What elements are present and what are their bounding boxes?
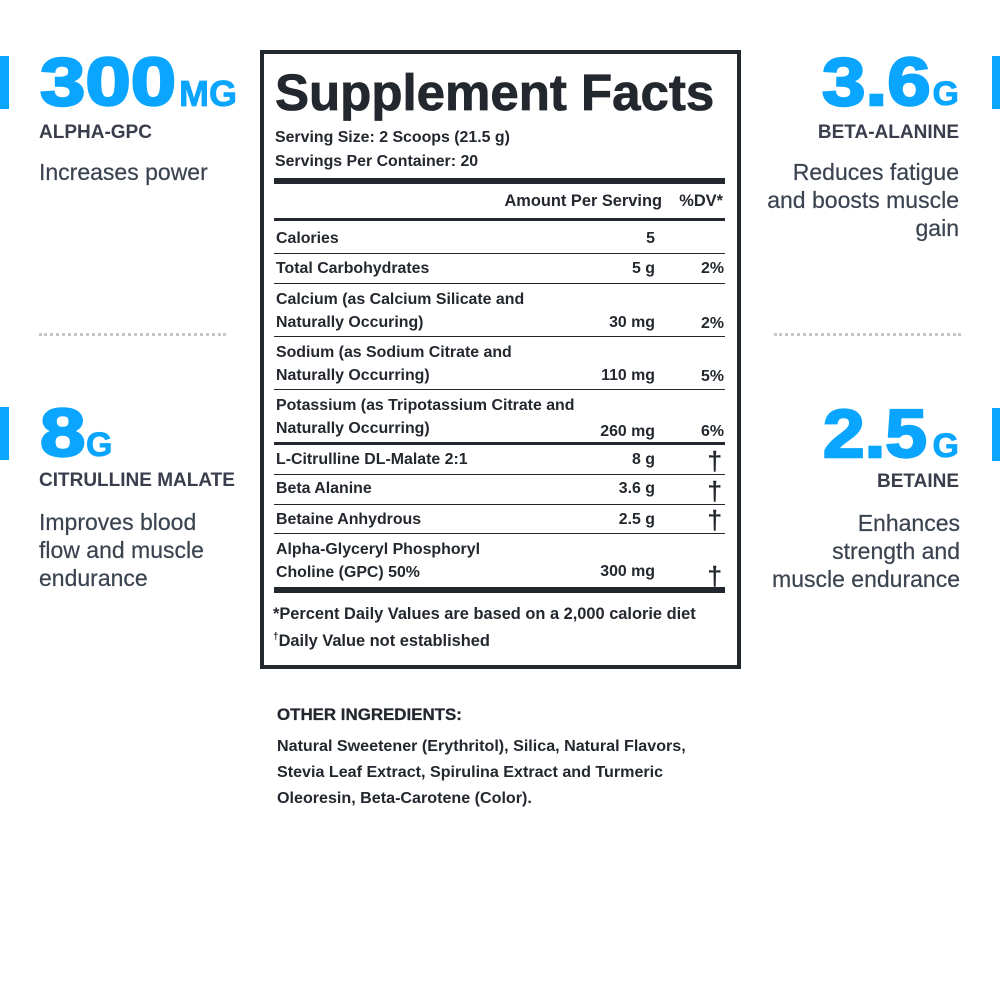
row: beta alanine: [276, 476, 722, 506]
row: sodium: Sodium (as Sodium Citrate and: [276, 344, 512, 361]
value: 300: [40, 44, 176, 120]
row: betaine: †: [708, 505, 722, 535]
row: calcium: Naturally Occuring): [276, 314, 423, 331]
description: Enhances: [858, 510, 960, 536]
row: l-citrulline: 8 g: [632, 451, 655, 468]
row: calcium: 2%: [701, 315, 724, 332]
row: calcium: Calcium (as Calcium Silicate and: [276, 291, 524, 308]
serving info: Servings Per Container: 20: [275, 153, 478, 170]
name: CITRULLINE MALATE: [39, 470, 235, 491]
description: [767, 159, 959, 242]
row: potassium: [276, 397, 724, 440]
footnotes: [273, 605, 696, 650]
serving info: Serving Size: 2 Scoops (21.5 g): [275, 129, 510, 146]
heading: Supplement Facts: [275, 64, 714, 121]
value: 2.5: [823, 396, 927, 472]
other ingredients text: Natural Sweetener (Erythritol), Silica, Natural Flavors,: [277, 737, 686, 755]
serving info: [275, 129, 510, 170]
row: alpha-gpc: 300 mg: [600, 563, 655, 580]
other ingredients text: Oleoresin, Beta-Carotene (Color).: [277, 789, 532, 807]
stat: beta-alanine: [767, 44, 1000, 242]
stat: betaine: [772, 396, 1000, 592]
name: BETAINE: [877, 471, 959, 492]
row: betaine: Betaine Anhydrous: [276, 511, 421, 528]
description: endurance: [39, 565, 148, 591]
description: and boosts muscle: [767, 187, 959, 213]
unit: G: [933, 75, 959, 113]
row: sodium: Naturally Occurring): [276, 367, 430, 384]
other ingredients text: [277, 737, 686, 807]
name: BETA-ALANINE: [818, 122, 959, 143]
name: ALPHA-GPC: [39, 122, 152, 143]
row: beta alanine: 3.6 g: [619, 480, 655, 497]
description: [39, 509, 204, 591]
row: betaine: [276, 505, 722, 535]
stat: citrulline malate: [0, 395, 235, 591]
accent bar: [0, 407, 9, 460]
row: potassium: Potassium (as Tripotassium Citrate and: [276, 397, 574, 414]
description: Increases power: [39, 159, 208, 185]
row: calcium: [276, 291, 724, 332]
row: alpha-gpc: Choline (GPC) 50%: [276, 564, 420, 581]
value: 3.6: [822, 44, 931, 120]
description: Improves blood: [39, 509, 196, 535]
row: calcium: 30 mg: [609, 314, 655, 331]
row: potassium: 260 mg: [600, 423, 655, 440]
row: alpha-gpc: [276, 541, 722, 591]
row: carbohydrates: Total Carbohydrates: [276, 260, 429, 277]
row: carbohydrates: 2%: [701, 260, 724, 277]
row: betaine: 2.5 g: [619, 511, 655, 528]
value: 8: [40, 395, 85, 471]
unit: G: [933, 427, 959, 465]
row: calories: [276, 230, 655, 247]
row: potassium: Naturally Occurring): [276, 420, 430, 437]
row: potassium: 6%: [701, 423, 724, 440]
column headers: %DV*: [679, 192, 723, 210]
row: l-citrulline: [276, 446, 722, 476]
panel: supplement facts: [260, 50, 741, 669]
row: alpha-gpc: Alpha-Glyceryl Phosphoryl: [276, 541, 480, 558]
unit: G: [86, 426, 112, 464]
unit: MG: [179, 72, 237, 114]
stat: alpha-gpc: [0, 44, 237, 186]
row: carbohydrates: [276, 260, 724, 277]
row: calories: 5: [646, 230, 655, 247]
footnotes: †Daily Value not established: [273, 632, 490, 650]
row: beta alanine: †: [708, 476, 722, 506]
column headers: Amount Per Serving: [504, 192, 662, 210]
row: sodium: 5%: [701, 368, 724, 385]
accent bar: [992, 56, 1000, 109]
row: sodium: [276, 344, 724, 385]
other ingredients heading: OTHER INGREDIENTS:: [277, 705, 462, 724]
description: [772, 510, 960, 592]
accent bar: [992, 408, 1000, 461]
description: gain: [916, 215, 959, 241]
row: calories: Calories: [276, 230, 339, 247]
row: l-citrulline: L-Citrulline DL-Malate 2:1: [276, 451, 468, 468]
other ingredients text: Stevia Leaf Extract, Spirulina Extract and Turmeric: [277, 763, 663, 781]
description: muscle endurance: [772, 566, 960, 592]
row: l-citrulline: †: [708, 446, 722, 476]
row: carbohydrates: 5 g: [632, 260, 655, 277]
description: strength and: [832, 538, 960, 564]
accent bar: [0, 56, 9, 109]
row: sodium: 110 mg: [601, 367, 655, 384]
description: flow and muscle: [39, 537, 204, 563]
description: Reduces fatigue: [793, 159, 959, 185]
row: alpha-gpc: †: [708, 561, 722, 591]
footnotes: *Percent Daily Values are based on a 2,000 calorie diet: [273, 605, 696, 623]
row: beta alanine: Beta Alanine: [276, 480, 372, 497]
